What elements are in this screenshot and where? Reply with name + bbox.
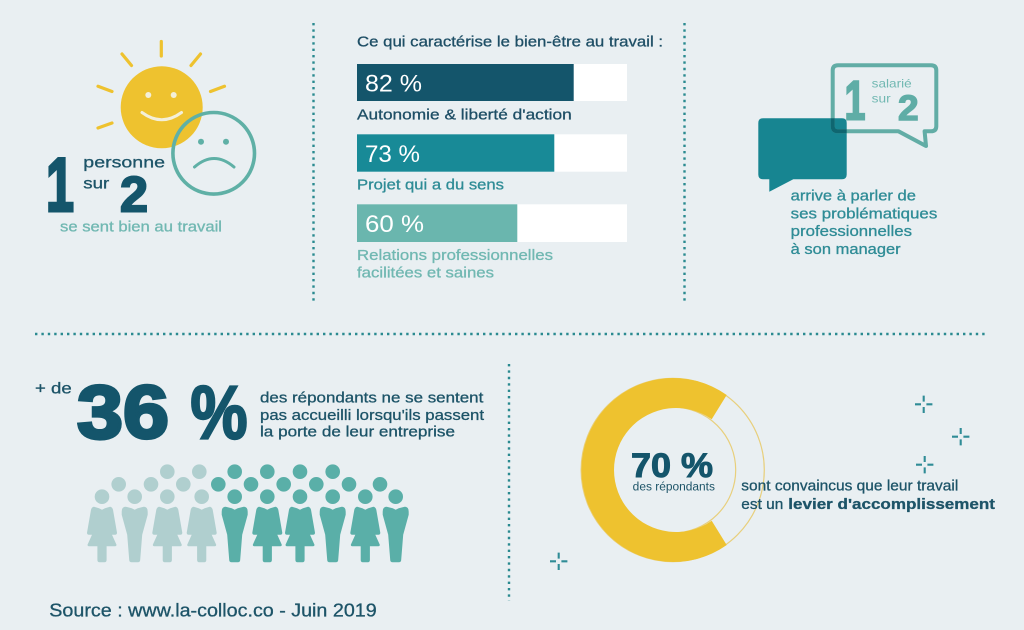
decorative sparkles: [550, 396, 969, 570]
big number 2: 2: [120, 166, 148, 222]
bar: 73 %: 73 %: [365, 141, 420, 168]
big number 2: 2: [898, 88, 919, 128]
bar: 82 %: Autonomie & liberté d'action: [357, 106, 572, 123]
icon: smiling sun: [98, 42, 224, 148]
bar: 60 %: [357, 204, 627, 282]
big figure 36: 36: [77, 370, 169, 454]
big figure percent: %: [190, 370, 248, 454]
text: sur: sur: [872, 92, 891, 106]
text block: arrive à parler de: [791, 188, 916, 205]
text: sur: sur: [83, 176, 110, 193]
figure: 70 %: 70 %: [631, 447, 713, 485]
text block: sont convaincus que leur travail: [741, 478, 958, 495]
bar: 82 %: [357, 64, 627, 123]
bar: 73 %: [357, 134, 627, 193]
text block: ses problématiques: [791, 205, 937, 222]
people: teal group: [211, 464, 409, 562]
bar: 60 %: facilitées et saines: [357, 265, 494, 282]
text block: [791, 188, 937, 258]
text block: [260, 389, 485, 441]
big number 1: 1: [844, 69, 866, 132]
text block: la porte de leur entreprise: [260, 424, 455, 441]
text: salarié: salarié: [872, 76, 912, 90]
text: + de: + de: [35, 380, 72, 397]
chart heading: Ce qui caractérise le bien-être au travail :: [357, 34, 663, 51]
people: light group: [87, 464, 217, 562]
panel: 1 personne sur 2: [46, 42, 254, 236]
panel: 36 %: [35, 370, 485, 562]
text: personne: personne: [83, 154, 165, 171]
icon: sad face: [173, 112, 254, 194]
bar: 60 %: Relations professionnelles: [357, 247, 553, 264]
pictogram: people: [87, 464, 409, 562]
donut caption: des répondants: [633, 482, 715, 494]
source line: Source : www.la-colloc.co - Juin 2019: [49, 601, 377, 621]
text block: pas accueilli lorsqu'ils passent: [260, 407, 485, 424]
big number 1: 1: [46, 143, 74, 228]
panel: 1 salarié sur 2: [758, 65, 937, 258]
text block: à son manager: [791, 241, 901, 258]
caption: se sent bien au travail: [60, 219, 222, 236]
icon: filled speech bubble: [758, 118, 847, 192]
bar: 73 %: Projet qui a du sens: [357, 176, 504, 193]
icon: outlined speech bubble: [833, 65, 936, 146]
text block: est un: [741, 496, 783, 513]
donut chart: [581, 378, 764, 562]
text block: professionnelles: [791, 223, 912, 240]
panel: bar chart: [357, 34, 663, 282]
text block: levier d'accomplissement: [788, 496, 995, 513]
text block: [741, 478, 995, 513]
bar: 60 %: 60 %: [365, 211, 424, 238]
bar: 82 %: 82 %: [365, 71, 422, 98]
panel: 70 %: [550, 378, 995, 570]
text block: des répondants ne se sentent: [260, 389, 484, 406]
